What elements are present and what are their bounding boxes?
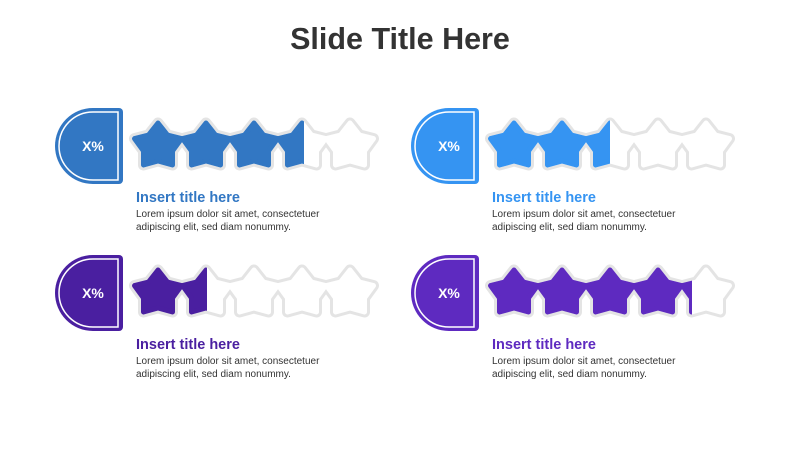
badge 3: X% xyxy=(82,285,104,301)
text 3: adipiscing elit, sed diam nonummy. xyxy=(136,369,291,380)
stars 3 xyxy=(134,270,374,312)
badge 4 xyxy=(411,255,479,331)
panel: rating 4 xyxy=(411,255,730,331)
heading 4: Insert title here xyxy=(492,337,596,353)
title: Slide Title Here xyxy=(290,22,510,56)
badge 1: X% xyxy=(82,138,104,154)
badge 1 xyxy=(55,108,123,184)
text 4: Lorem ipsum dolor sit amet, consectetuer xyxy=(492,356,675,367)
panel: rating 2 xyxy=(411,108,730,184)
heading 1: Insert title here xyxy=(136,190,240,206)
heading 2: Insert title here xyxy=(492,190,596,206)
badge 4: X% xyxy=(438,285,460,301)
badge 3 xyxy=(55,255,123,331)
panel: rating 3 xyxy=(55,255,374,331)
badge 2: X% xyxy=(438,138,460,154)
badge 2 xyxy=(411,108,479,184)
text 2: adipiscing elit, sed diam nonummy. xyxy=(492,222,647,233)
text 1 xyxy=(136,209,320,233)
text 3 xyxy=(136,356,320,380)
panel: rating 1 xyxy=(55,108,374,184)
text 3: Lorem ipsum dolor sit amet, consectetuer xyxy=(136,356,319,367)
text 2 xyxy=(492,209,676,233)
stars 2 xyxy=(490,123,730,165)
heading 3: Insert title here xyxy=(136,337,240,353)
text 4 xyxy=(492,356,676,380)
text 1: Lorem ipsum dolor sit amet, consectetuer xyxy=(136,209,319,220)
text 2: Lorem ipsum dolor sit amet, consectetuer xyxy=(492,209,675,220)
stars 4 xyxy=(490,270,730,312)
text 1: adipiscing elit, sed diam nonummy. xyxy=(136,222,291,233)
stars 1 xyxy=(134,123,374,165)
text 4: adipiscing elit, sed diam nonummy. xyxy=(492,369,647,380)
